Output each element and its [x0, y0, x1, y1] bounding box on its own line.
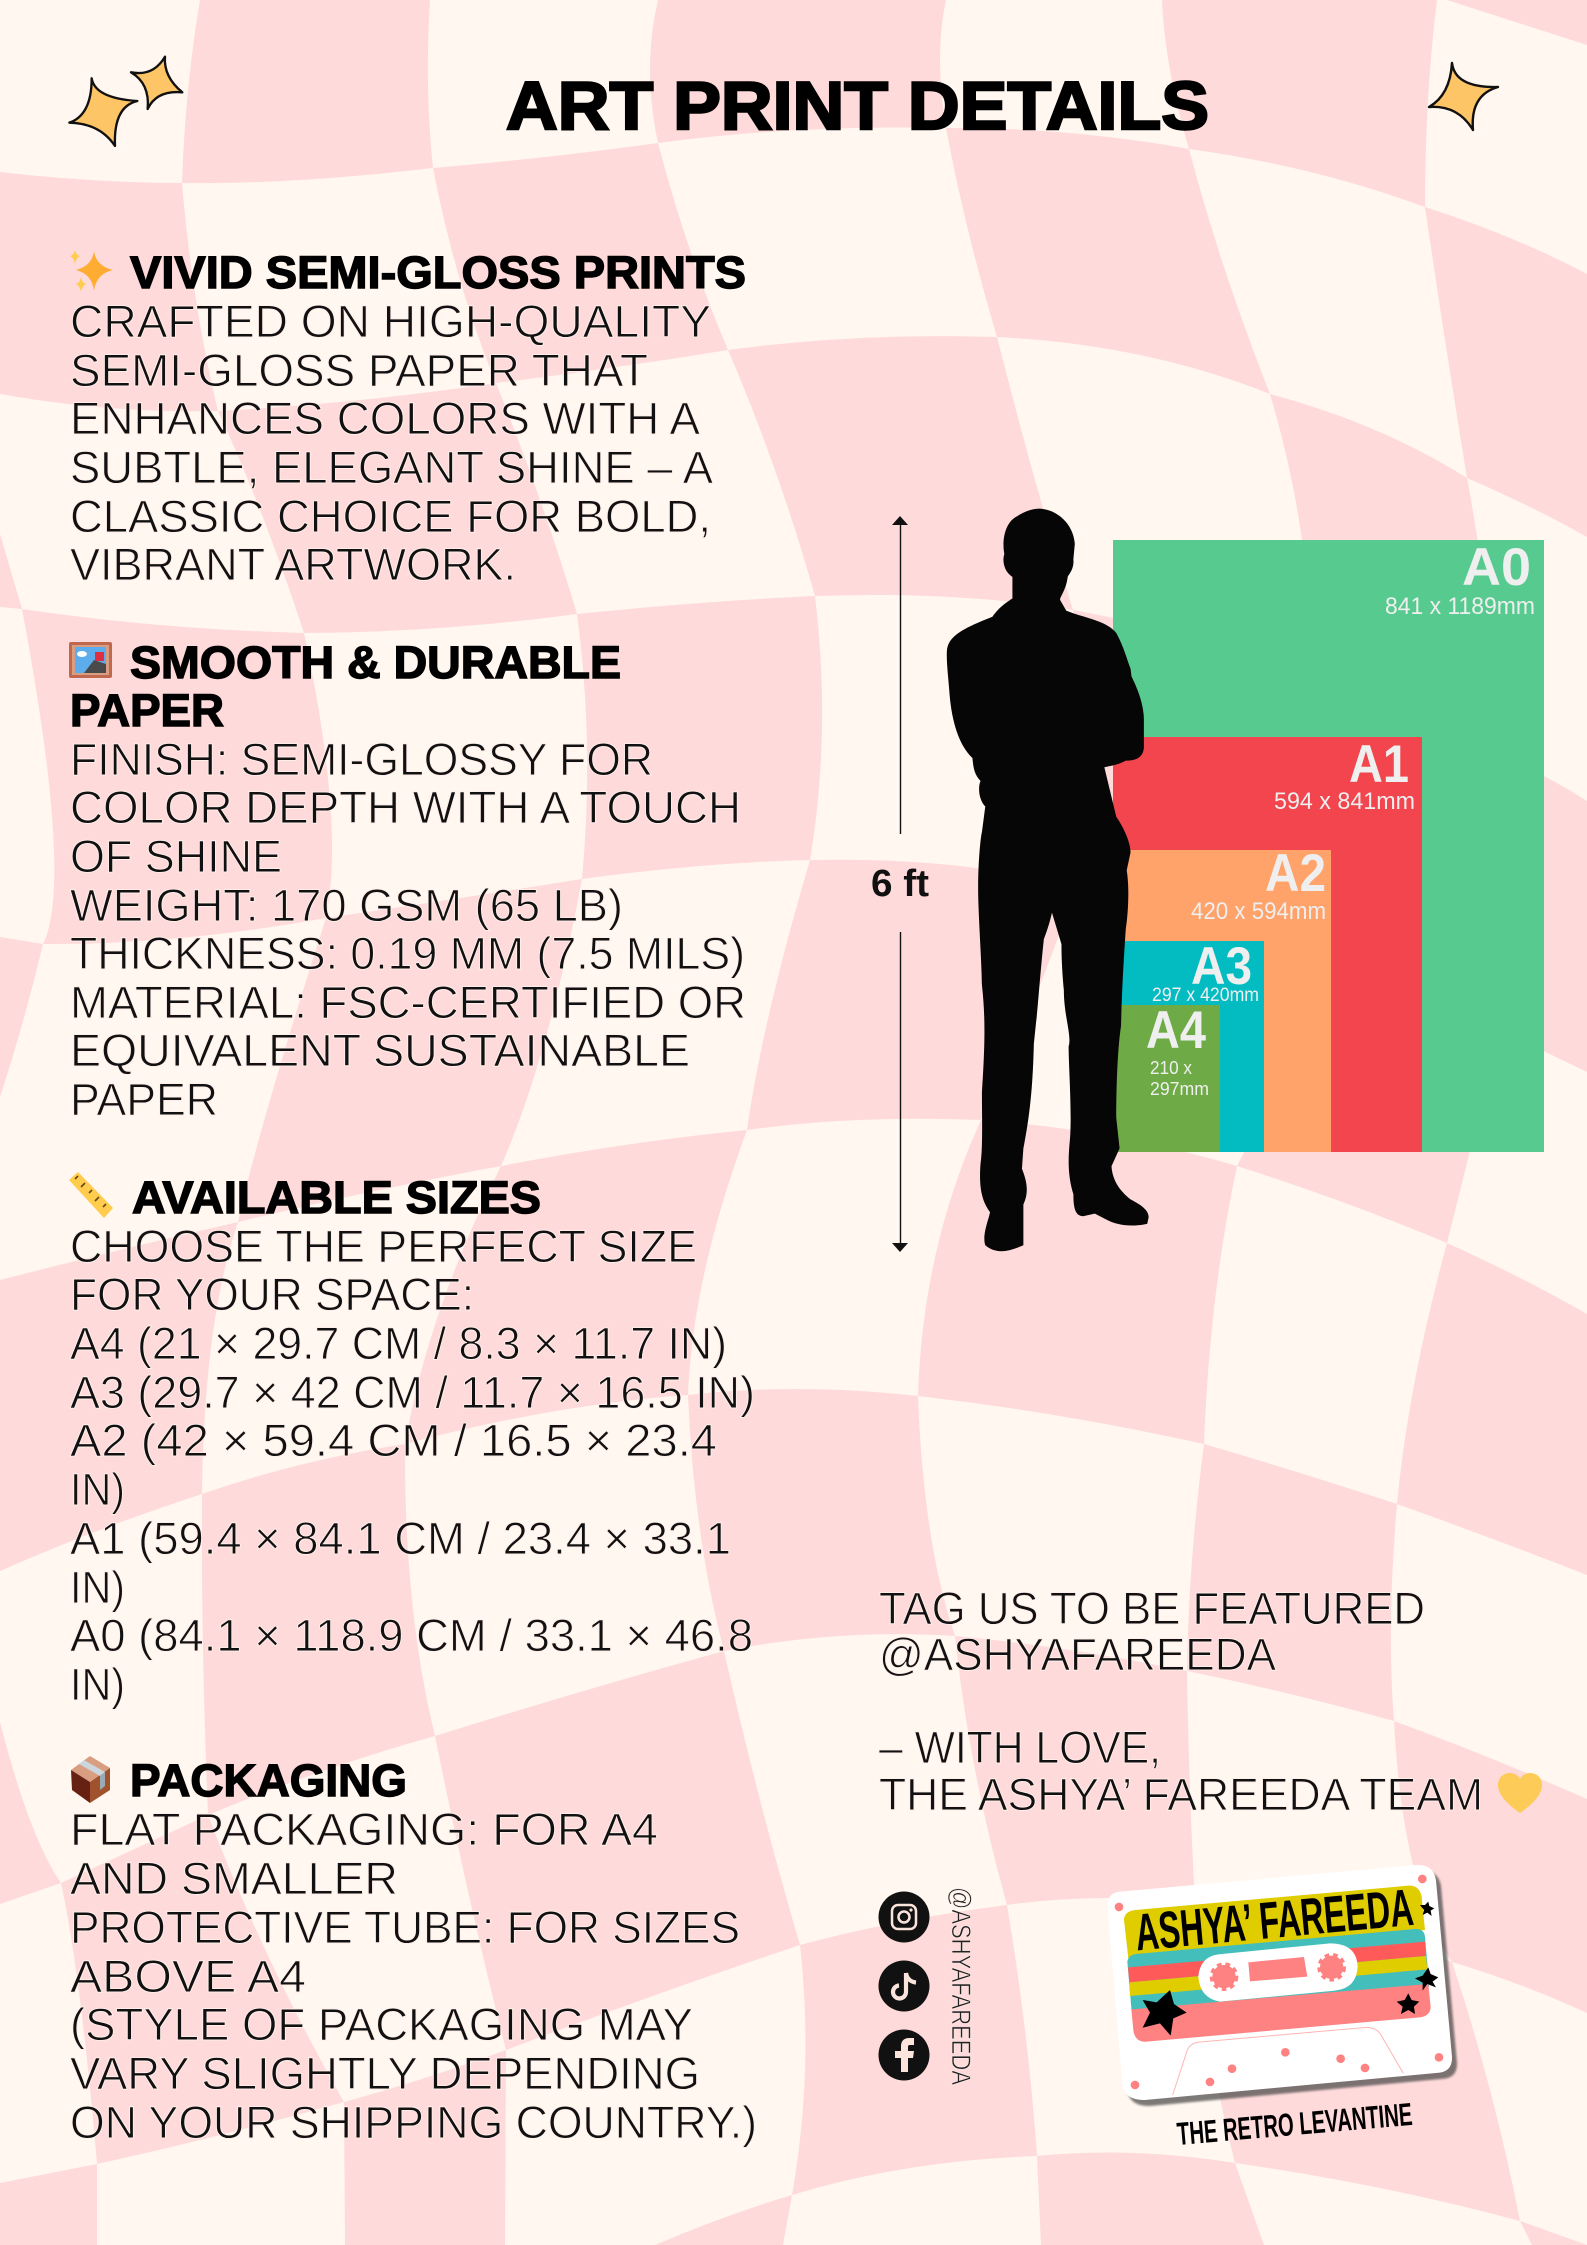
vertical social handle: @ASHYAFAREEDA	[946, 1887, 976, 2085]
body text: PROTECTIVE TUBE: FOR SIZES	[70, 1902, 740, 1953]
body text: FINISH: SEMI-GLOSSY FOR	[70, 734, 653, 785]
icon: facebook	[878, 2030, 930, 2080]
heading: PAPER	[70, 685, 224, 736]
cassette drawing	[1107, 1865, 1452, 2100]
body text	[70, 296, 713, 590]
text: sign-off: THE ASHYA’ FAREEDA TEAM	[879, 1769, 1483, 1820]
body text: AND SMALLER	[70, 1853, 398, 1904]
arrow: height up	[892, 516, 908, 834]
arrow: height down	[892, 932, 908, 1252]
cassette label: brand name: ASHYA’ FAREEDA	[1133, 1879, 1416, 1962]
body text	[70, 1221, 755, 1710]
body text: CRAFTED ON HIGH-QUALITY	[70, 296, 711, 347]
heading	[70, 637, 621, 736]
text: sign-off	[879, 1722, 1483, 1820]
logo: cassette	[1107, 1865, 1457, 2106]
heading: SMOOTH & DURABLE	[130, 637, 621, 688]
body text: CHOOSE THE PERFECT SIZE	[70, 1221, 697, 1272]
title: ART PRINT DETAILS	[506, 68, 1209, 144]
size A2	[1113, 844, 1331, 1152]
body text: PAPER	[70, 1074, 218, 1125]
text: tag us: @ASHYAFAREEDA	[879, 1629, 1276, 1680]
body text: VARY SLIGHTLY DEPENDING	[70, 2048, 700, 2099]
body text: MATERIAL: FSC-CERTIFIED OR	[70, 977, 746, 1028]
heading: AVAILABLE SIZES	[132, 1172, 541, 1223]
icon: man silhouette	[947, 509, 1149, 1251]
body text: IN)	[70, 1659, 125, 1710]
chart: paper size comparison	[1113, 538, 1544, 1152]
icon: tiktok	[878, 1960, 930, 2012]
size A3: 297 x 420mm	[1152, 985, 1259, 1006]
size A2: 420 x 594mm	[1191, 898, 1326, 925]
body text: SEMI-GLOSS PAPER THAT	[70, 345, 648, 396]
icon: yellow heart	[1498, 1773, 1542, 1813]
height label: 6 ft	[871, 863, 929, 905]
size A1: A1	[1349, 735, 1409, 794]
body text: THICKNESS: 0.19 MM (7.5 MILS)	[70, 928, 745, 979]
body text: A3 (29.7 × 42 CM / 11.7 × 16.5 IN)	[70, 1367, 755, 1418]
icon: package emoji	[71, 1756, 110, 1803]
heading: VIVID SEMI-GLOSS PRINTS	[130, 247, 746, 298]
size A4	[1113, 1001, 1220, 1152]
size A0: 841 x 1189mm	[1385, 593, 1535, 620]
size A4: A4	[1146, 1001, 1206, 1060]
body text: (STYLE OF PACKAGING MAY	[70, 1999, 693, 2050]
section: available sizes	[69, 1172, 755, 1710]
body text: VIBRANT ARTWORK.	[70, 539, 516, 590]
icon: instagram	[878, 1892, 930, 1942]
body text: EQUIVALENT SUSTAINABLE	[70, 1025, 690, 1076]
section: vivid semi-gloss prints	[70, 247, 746, 590]
size A0	[1113, 538, 1544, 1152]
size A2: A2	[1265, 844, 1326, 903]
icon: ruler emoji	[69, 1172, 113, 1218]
body text: SUBTLE, ELEGANT SHINE – A	[70, 442, 713, 493]
body text	[70, 734, 746, 1125]
size A4: 210 x	[1150, 1058, 1192, 1078]
cassette shadow	[1112, 1871, 1457, 2106]
body text: A2 (42 × 59.4 CM / 16.5 × 23.4	[70, 1415, 717, 1466]
body text: ON YOUR SHIPPING COUNTRY.)	[70, 2097, 757, 2148]
body text: FOR YOUR SPACE:	[70, 1269, 474, 1320]
section: smooth and durable paper	[69, 637, 746, 1125]
icon: sparkle top right	[1429, 63, 1498, 130]
body text: IN)	[70, 1562, 125, 1613]
body text: A4 (21 × 29.7 CM / 8.3 × 11.7 IN)	[70, 1318, 727, 1369]
text: tag us	[879, 1583, 1425, 1680]
section: packaging	[70, 1755, 757, 2148]
size A3	[1113, 937, 1264, 1152]
heading: PACKAGING	[130, 1755, 407, 1806]
body text: OF SHINE	[70, 831, 282, 882]
body text: COLOR DEPTH WITH A TOUCH	[70, 782, 741, 833]
size A3: A3	[1191, 937, 1252, 996]
icon: framed picture emoji	[69, 642, 112, 678]
size A0: A0	[1462, 538, 1531, 597]
body text: ENHANCES COLORS WITH A	[70, 393, 700, 444]
size A1	[1113, 735, 1422, 1152]
text: tag us: TAG US TO BE FEATURED	[879, 1583, 1425, 1634]
body text: IN)	[70, 1464, 125, 1515]
body text: ABOVE A4	[70, 1951, 306, 2002]
body text: A0 (84.1 × 118.9 CM / 33.1 × 46.8	[70, 1610, 753, 1661]
body text	[70, 1804, 757, 2148]
icon: twin sparkles top left	[69, 57, 182, 146]
icon: sparkles emoji	[70, 250, 113, 292]
size A1: 594 x 841mm	[1274, 788, 1415, 815]
logo tagline: THE RETRO LEVANTINE	[1176, 2096, 1414, 2152]
body text: FLAT PACKAGING: FOR A4	[70, 1804, 658, 1855]
size A4: 297mm	[1150, 1079, 1209, 1099]
body text: WEIGHT: 170 GSM (65 LB)	[70, 880, 623, 931]
text: sign-off: – WITH LOVE,	[879, 1722, 1161, 1773]
body text: A1 (59.4 × 84.1 CM / 23.4 × 33.1	[70, 1513, 731, 1564]
body text: CLASSIC CHOICE FOR BOLD,	[70, 491, 711, 542]
